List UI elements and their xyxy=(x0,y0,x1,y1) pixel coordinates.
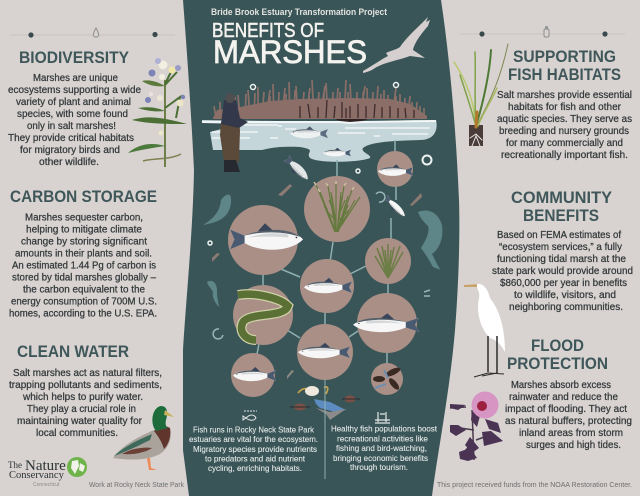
text: biodiversity: species, with some found xyxy=(17,109,128,120)
footer: work location: Work at Rocky Neck State Park xyxy=(89,482,184,489)
circle: salt marsh grass xyxy=(304,176,370,242)
text: clean water: which helps to purify water. xyxy=(22,392,143,403)
text: carbon storage: change by storing significant xyxy=(21,236,147,248)
water xyxy=(202,120,437,162)
text: community benefits: “ecosystem services,” a fully xyxy=(499,242,622,253)
text: biodiversity: other wildlife. xyxy=(39,157,99,168)
circle: silverside fish xyxy=(300,259,354,313)
left ornament xyxy=(10,28,175,38)
marsh reeds xyxy=(213,80,427,122)
heading: carbon storage: CARBON STORAGE xyxy=(10,187,157,206)
text: biodiversity: only in salt marshes! xyxy=(27,121,116,132)
text: biodiversity xyxy=(8,73,141,168)
text: supporting fish habitats: Salt marshes provide essential xyxy=(497,90,632,101)
text: recreation: fishing and bird-watching, xyxy=(336,443,427,453)
connector lines xyxy=(257,140,396,379)
text: fish runs: cycling, enriching habitats. xyxy=(208,463,302,473)
circle: menhaden xyxy=(297,324,353,380)
bubbles xyxy=(208,82,432,339)
text: community benefits: to wildlife, visitors, and xyxy=(514,290,616,301)
heading: flood protection: FLOOD xyxy=(531,336,584,355)
text: carbon storage: energy consumption of 700M U.S. xyxy=(11,296,157,308)
icon: marsh grass xyxy=(454,44,508,146)
text: fish runs: Fish runs in Rocky Neck State Park xyxy=(193,424,315,434)
text: supporting fish habitats: habitats for fish and other xyxy=(508,102,622,113)
text: recreation: recreational activities like xyxy=(337,434,428,444)
text: community benefits: functioning tidal marsh at the xyxy=(497,254,626,265)
text: flood protection: Marshes absorb excess xyxy=(511,380,611,391)
text: community benefits: state park would provide around xyxy=(492,266,633,277)
center divider xyxy=(324,379,326,479)
text: biodiversity: variety of plant and animal xyxy=(16,97,131,108)
heading: community benefits xyxy=(511,188,613,225)
fish in water xyxy=(290,126,351,156)
text: biodiversity: They provide critical habitats xyxy=(8,133,134,144)
icon: great egret xyxy=(464,284,505,377)
otters and small animals xyxy=(203,184,442,379)
text: community benefits xyxy=(492,230,633,313)
circle: small fish top right xyxy=(377,151,413,187)
icon: hibiscus xyxy=(450,392,503,461)
text: supporting fish habitats: recreationally important fish. xyxy=(501,150,628,161)
text: community benefits: Based on FEMA estimates of xyxy=(497,230,621,241)
text: flood protection: rainwater and reduce the xyxy=(509,392,618,403)
text: flood protection: impact of flooding. They act xyxy=(505,404,627,415)
heading: supporting fish habitats: FISH HABITATS xyxy=(508,65,621,84)
heading: supporting fish habitats: SUPPORTING xyxy=(513,47,616,66)
text: community benefits: $860,000 per year in benefits xyxy=(500,278,627,289)
text: carbon storage: the carbon equivalent to the xyxy=(23,284,145,296)
logo: the nature conservancy: Connecticut xyxy=(33,482,60,488)
circle: mussels xyxy=(371,363,403,395)
heading: community benefits: COMMUNITY xyxy=(511,188,613,207)
text: flood protection: surges and high tides. xyxy=(526,440,621,451)
logo: the nature conservancy: Nature xyxy=(25,458,66,474)
circle: river herring large xyxy=(228,205,303,275)
text: recreation xyxy=(331,424,438,472)
heading: flood protection: PROTECTION xyxy=(507,354,608,373)
icon: recreation xyxy=(375,412,390,423)
text: clean water: trapping pollutants and sediments, xyxy=(9,380,162,391)
text: biodiversity: ecosystems supporting a wide xyxy=(8,85,141,96)
central dark panel xyxy=(183,0,459,496)
icon: fish xyxy=(243,411,257,420)
text: supporting fish habitats: aquatic species. They serve as xyxy=(497,114,632,125)
text: recreation: through tourism. xyxy=(350,462,408,472)
text: community benefits: neighboring communities. xyxy=(509,302,623,313)
icon: mallard duck xyxy=(113,406,174,470)
circle: striped bass xyxy=(353,293,419,353)
text: carbon storage xyxy=(9,212,157,320)
text: clean water: They play a crucial role in xyxy=(27,404,136,415)
text: clean water: maintaining water quality for xyxy=(17,416,143,427)
text: fish runs: to predators and aid nutrient xyxy=(205,454,306,464)
heading: biodiversity: BIODIVERSITY xyxy=(19,48,130,67)
heading: community benefits: BENEFITS xyxy=(523,206,599,225)
text: flood protection xyxy=(505,380,632,451)
title block: BENEFITS OF xyxy=(212,20,324,42)
logo: the nature conservancy: The xyxy=(8,460,22,470)
text: recreation: Healthy fish populations boost xyxy=(331,424,438,434)
circle: american eel xyxy=(233,285,293,345)
text: flood protection: inland areas from storm xyxy=(519,428,623,439)
text: supporting fish habitats: breeding and nursery grounds xyxy=(499,126,629,137)
heading: supporting fish habitats xyxy=(508,47,621,84)
text: clean water xyxy=(9,368,162,439)
text: fish runs xyxy=(189,424,318,473)
logo: the nature conservancy: Conservancy xyxy=(9,470,65,481)
swimming fish xyxy=(282,155,407,220)
text: clean water: Salt marshes act as natural filters, xyxy=(13,368,162,379)
crabs and blue crab group xyxy=(290,386,360,420)
text: carbon storage: Marshes sequester carbon, xyxy=(25,212,143,224)
title block xyxy=(211,7,387,70)
title block: MARSHES xyxy=(213,34,367,70)
text: biodiversity: Marshes are unique xyxy=(33,73,118,84)
logo: the nature conservancy xyxy=(8,457,87,488)
text: biodiversity: for migratory birds and xyxy=(20,145,120,156)
circle: cordgrass xyxy=(365,238,411,284)
heading: flood protection xyxy=(507,336,608,373)
icon: aster plant xyxy=(128,58,187,167)
text: clean water: local communities. xyxy=(36,428,118,439)
text: supporting fish habitats: for many commercially and xyxy=(506,138,623,149)
heading: clean water: CLEAN WATER xyxy=(17,342,129,361)
circle: tomcod xyxy=(231,353,276,397)
fisherman xyxy=(220,93,248,172)
icon: flying bird xyxy=(363,17,430,73)
text: supporting fish habitats xyxy=(497,90,632,161)
text: carbon storage: stored by tidal marshes globally – xyxy=(12,272,156,284)
right ornament xyxy=(460,26,625,37)
text: fish runs: estuaries are vital for the ecosystem. xyxy=(189,434,318,444)
footer: funding note: This project received funds from the NOAA Restoration Center. xyxy=(437,482,632,489)
text: carbon storage: helping to mitigate climate xyxy=(26,224,142,236)
text: carbon storage: homes, according to the U.S. EPA. xyxy=(9,308,157,320)
text: carbon storage: An estimated 1.44 Pg of carbon is xyxy=(12,260,156,272)
text: recreation: bringing economic benefits xyxy=(333,453,428,463)
title block: Bride Brook Estuary Transformation Project xyxy=(211,7,387,17)
text: carbon storage: amounts in their plants and soil. xyxy=(15,248,152,260)
text: fish runs: Migratory species provide nutrients xyxy=(193,444,317,454)
text: flood protection: as natural buffers, protecting xyxy=(505,416,632,427)
